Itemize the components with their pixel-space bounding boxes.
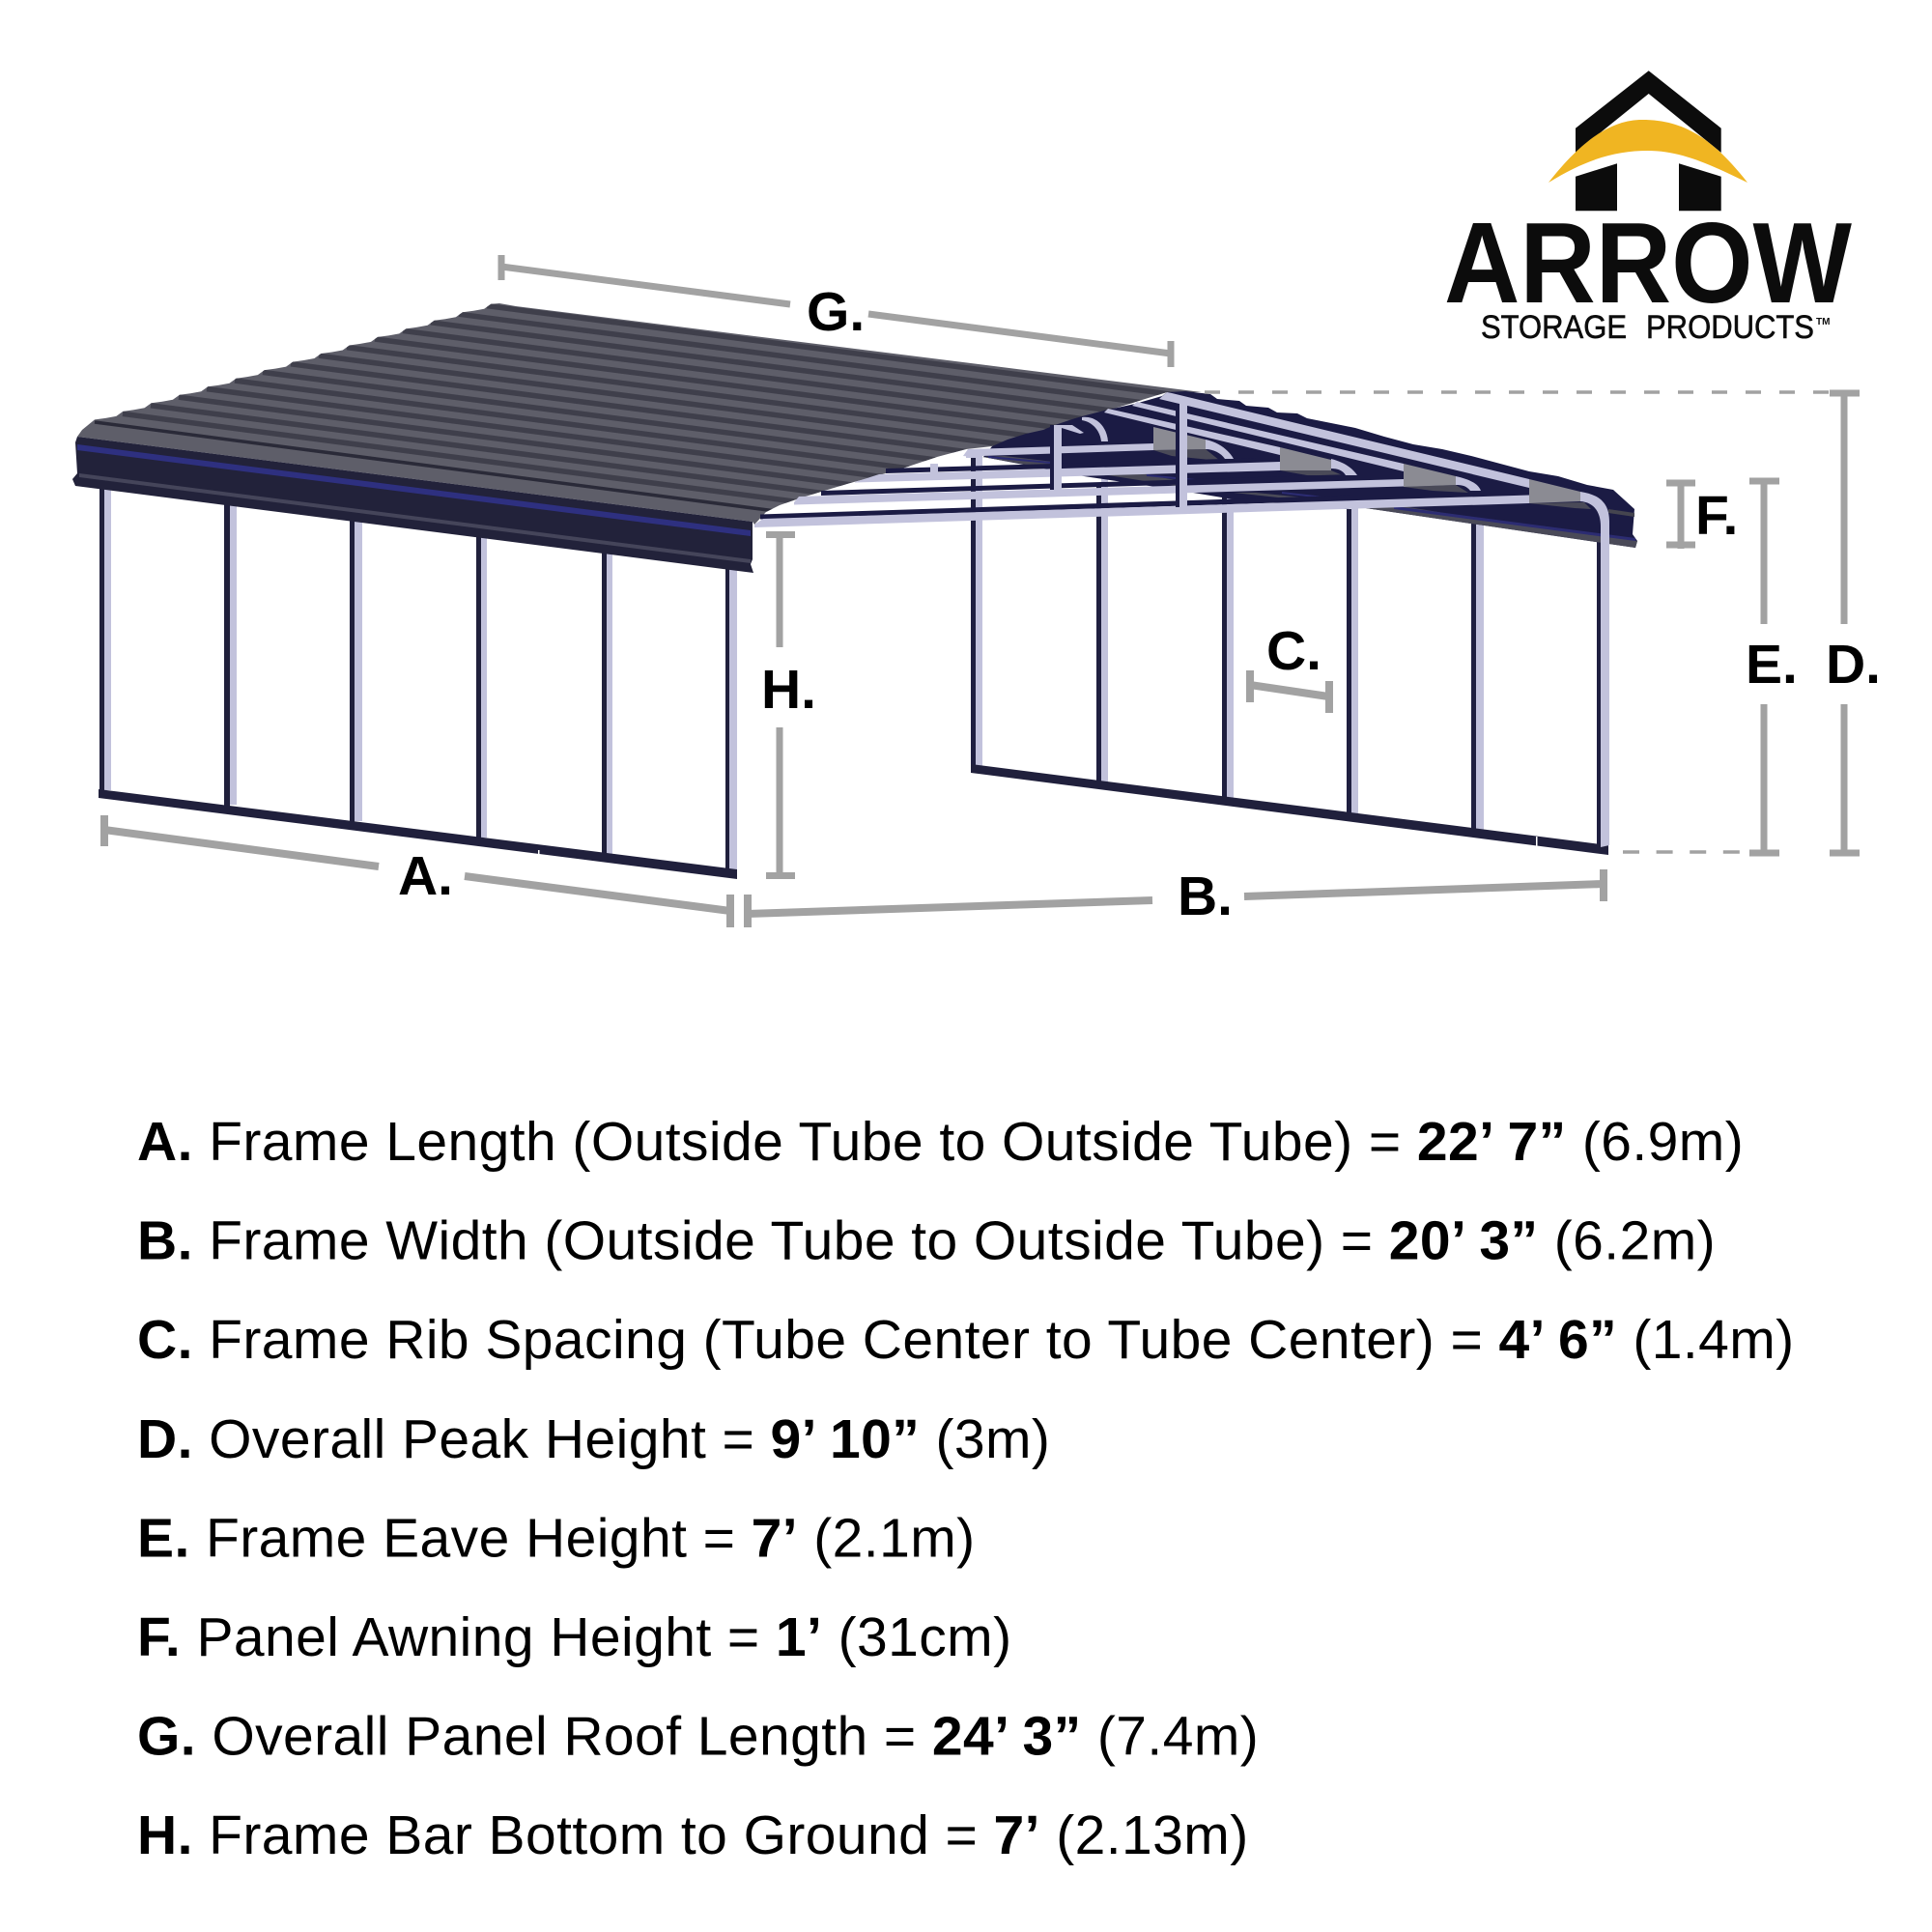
dimension G xyxy=(501,255,1171,367)
legend D: D. Overall Peak Height = 9’ 10” (3m) xyxy=(137,1408,1050,1470)
logo tagline xyxy=(1481,309,1814,346)
dimension legend list xyxy=(137,1111,1795,1866)
legend A: A. Frame Length (Outside Tube to Outside Tube) = 22’ 7” (6.9m) xyxy=(137,1111,1744,1173)
legend C: C. Frame Rib Spacing (Tube Center to Tube Center) = 4’ 6” (1.4m) xyxy=(137,1309,1795,1371)
legend E: E. Frame Eave Height = 7’ (2.1m) xyxy=(137,1507,976,1569)
carport illustration xyxy=(58,290,1637,879)
legend H: H. Frame Bar Bottom to Ground = 7’ (2.13m) xyxy=(137,1804,1249,1866)
dashed peak height guide xyxy=(1205,390,1829,394)
legend B: B. Frame Width (Outside Tube to Outside Tube) = 20’ 3” (6.2m) xyxy=(137,1210,1716,1272)
right wall posts xyxy=(971,441,1601,848)
grey gusset brackets xyxy=(1153,427,1580,503)
gable king posts xyxy=(1050,404,1187,508)
legend G: G. Overall Panel Roof Length = 24’ 3” (7.4m) xyxy=(137,1706,1259,1768)
left wall bottom rail xyxy=(99,789,737,879)
dashed ground guide xyxy=(1623,850,1749,854)
dark shadow lines above tie bars xyxy=(760,458,1352,520)
left wall posts xyxy=(99,483,737,872)
dimension G: G. xyxy=(807,281,865,343)
dimension F xyxy=(1666,480,1738,549)
frame rafters xyxy=(1104,392,1529,488)
short vertical stub at far frame xyxy=(930,464,938,477)
trademark: TM xyxy=(1816,317,1830,327)
logo: Arrow Storage Products xyxy=(1444,71,1853,346)
dimension F: F. xyxy=(1695,485,1738,547)
dimension C xyxy=(1250,620,1329,713)
frame tie bars xyxy=(754,443,1529,527)
dimension B: B. xyxy=(1178,866,1233,927)
logo tagline: PRODUCTS xyxy=(1646,309,1814,346)
icon: house with gold arc xyxy=(1548,71,1747,211)
curved frame corners xyxy=(1082,417,1609,847)
roof fascia with blue stripe xyxy=(72,437,753,573)
dimension C: C. xyxy=(1266,620,1321,682)
logo tagline: STORAGE xyxy=(1481,309,1627,346)
right wall bottom rail xyxy=(971,764,1608,855)
dimension B xyxy=(748,866,1604,927)
dimension A: A. xyxy=(398,845,453,907)
logo wordmark: ARROW xyxy=(1444,199,1853,327)
dimension A xyxy=(104,815,730,927)
corrugated roof panel xyxy=(77,303,1202,525)
dimension E: E. xyxy=(1746,634,1798,696)
legend F: F. Panel Awning Height = 1’ (31cm) xyxy=(137,1606,1012,1668)
gable underside of roof xyxy=(982,391,1637,548)
dimension H: H. xyxy=(761,659,816,721)
dimension D: D. xyxy=(1826,634,1881,696)
